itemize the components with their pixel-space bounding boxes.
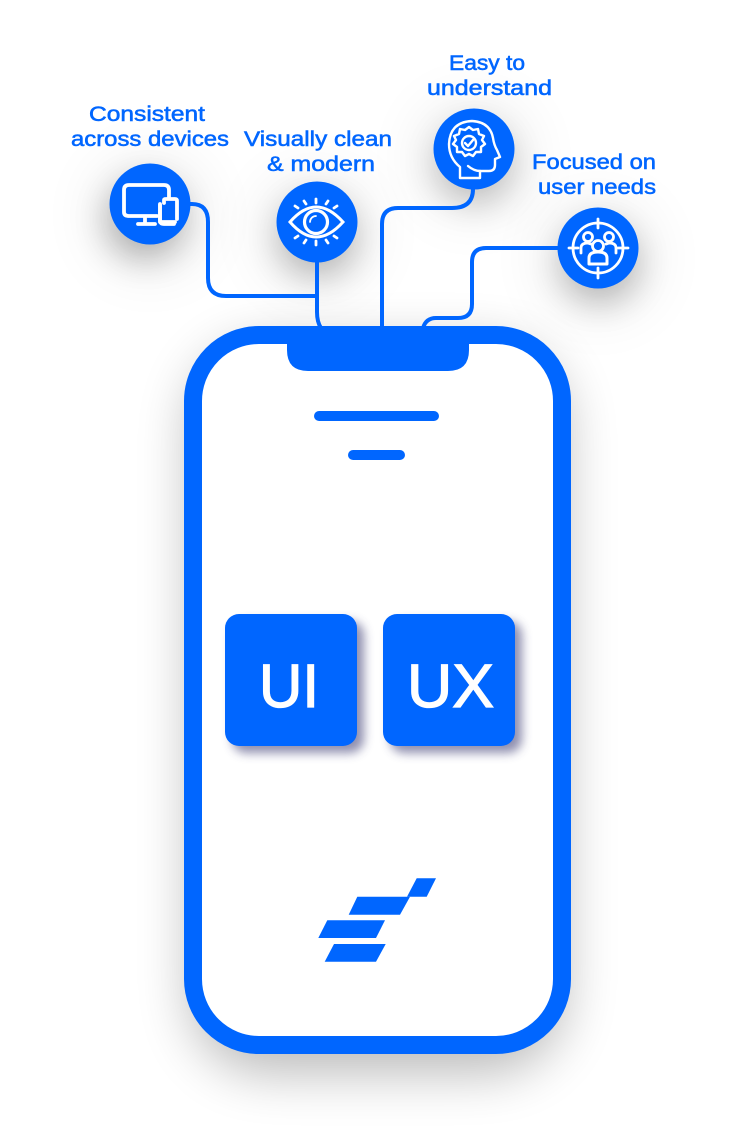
circle (558, 208, 638, 288)
icon: head with gear (449, 121, 500, 178)
node: easy to understand (427, 52, 552, 190)
label (532, 151, 656, 199)
icon: eye (290, 199, 343, 245)
label: user needs (538, 176, 656, 199)
UI tile (225, 614, 364, 753)
label: Visually clean (244, 128, 392, 151)
UX tile: UX (407, 652, 494, 720)
icon: devices (124, 185, 177, 224)
UI tile: UI (259, 652, 319, 720)
node: focused on user needs (532, 151, 656, 288)
node: visually clean and modern (244, 128, 392, 262)
label: across devices (71, 128, 229, 151)
label: understand (427, 77, 552, 100)
circle (434, 108, 514, 190)
logo (318, 878, 436, 962)
connector lines (190, 189, 558, 328)
label: Consistent (89, 103, 205, 126)
label: Easy to (449, 52, 525, 75)
label (244, 128, 392, 176)
screen line short (348, 450, 405, 460)
label: Focused on (532, 151, 656, 174)
screen line long (314, 411, 439, 421)
label: & modern (267, 153, 375, 176)
UX tile (383, 614, 522, 753)
circle (276, 182, 358, 262)
label (71, 103, 229, 151)
drop shadows (100, 108, 648, 1073)
label (427, 52, 552, 100)
circle (110, 164, 190, 244)
icon: users in target (569, 219, 628, 278)
phone frame (193, 335, 562, 1045)
phone (193, 335, 562, 1045)
phone notch (287, 340, 469, 371)
node: consistent across devices (71, 103, 229, 244)
